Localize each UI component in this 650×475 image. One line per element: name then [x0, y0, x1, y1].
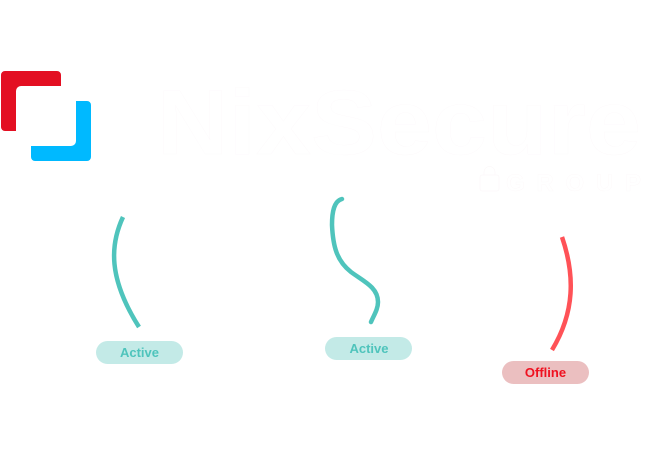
status pill: offline [502, 361, 589, 384]
status pill: active centre: Active [349, 341, 389, 356]
connector: active left [114, 217, 139, 327]
connector: offline right [552, 237, 571, 350]
logo [1, 71, 641, 197]
icon: blue square bracket [31, 101, 91, 161]
status pill: active left: Active [120, 345, 159, 360]
status pill: active left [96, 341, 183, 364]
icon: red square bracket [1, 71, 61, 131]
connector: active centre [332, 199, 378, 322]
wordmark: NixSecure [157, 72, 641, 174]
status pill: offline: Offline [525, 365, 566, 380]
group label: GROUP [506, 170, 641, 197]
status pill: active centre [325, 337, 412, 360]
icon: lock [480, 166, 499, 191]
